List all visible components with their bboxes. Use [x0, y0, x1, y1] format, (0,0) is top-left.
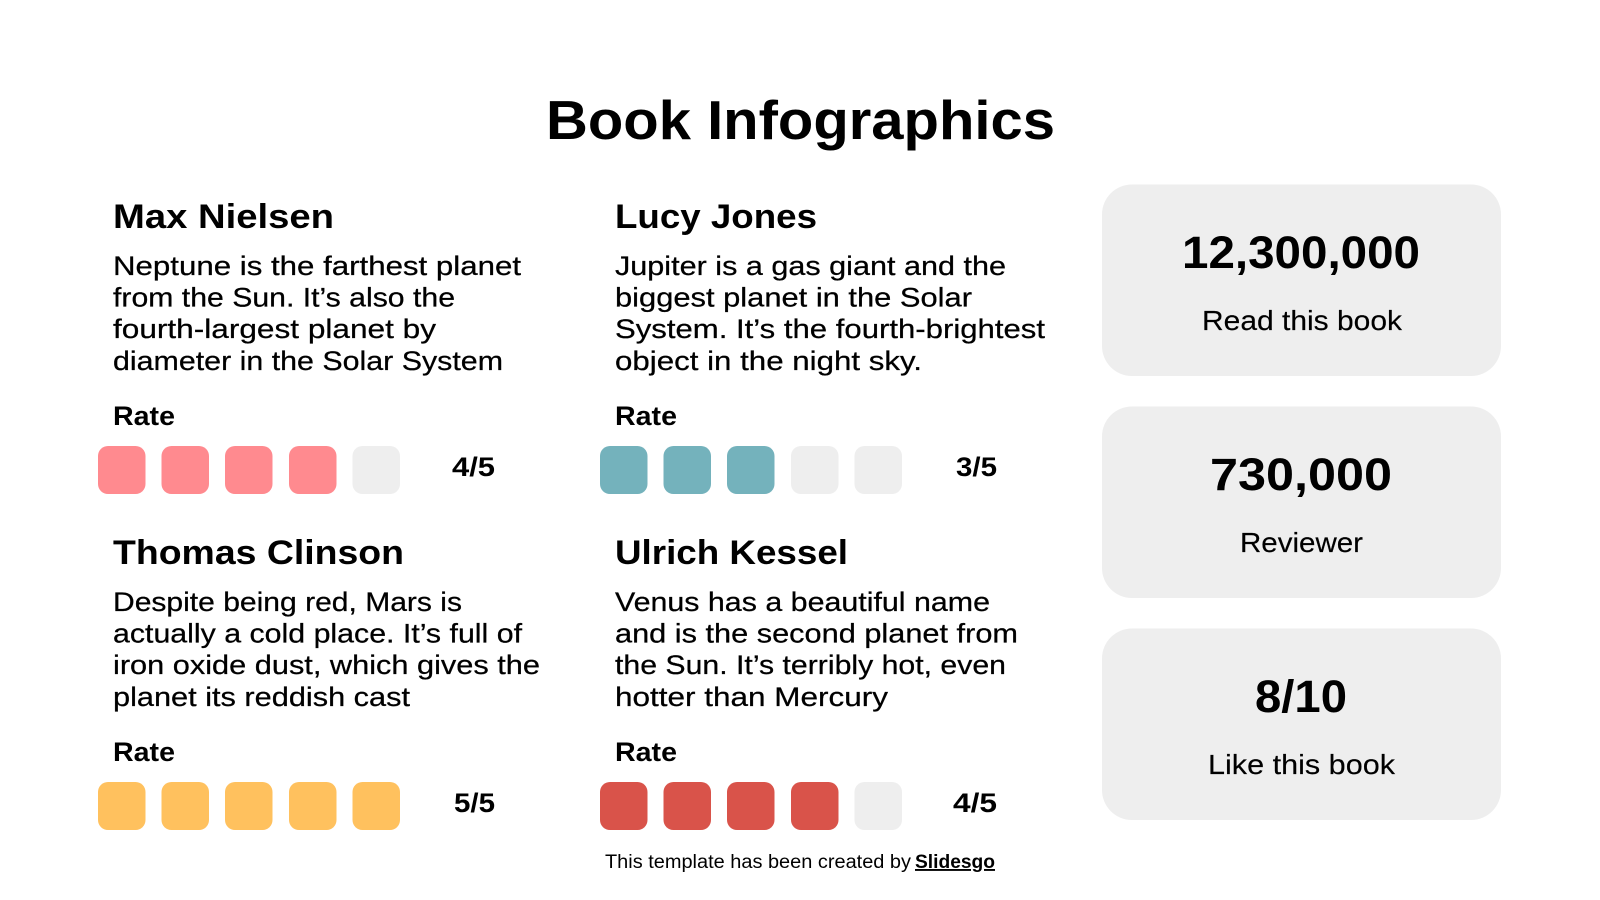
label: Rate: Rate — [113, 401, 175, 431]
stat card: reviewers — [1102, 406, 1501, 598]
rating squares: 4 of 5 — [98, 446, 400, 494]
stat number: 730,000 — [1210, 449, 1392, 500]
text block: Mars description: planet its reddish cast — [113, 682, 411, 712]
stat card: likes — [1102, 628, 1501, 820]
rating value: 4/5 — [452, 452, 495, 482]
stat label: Like this book — [1208, 749, 1396, 780]
heading: Ulrich Kessel: Ulrich Kessel — [615, 534, 848, 572]
text block: Neptune description — [113, 251, 522, 376]
text block: Mars description: actually a cold place. It’s full of — [113, 618, 523, 648]
stat number: 12,300,000 — [1182, 227, 1420, 278]
heading: Max Nielsen: Max Nielsen — [113, 198, 334, 236]
text block: Mars description: iron oxide dust, which gives the — [113, 650, 540, 680]
text block: Venus description: the Sun. It’s terribly hot, even — [615, 650, 1006, 680]
panel: Max Nielsen review — [98, 198, 522, 494]
rating value: 4/5 — [953, 788, 997, 818]
panel: Ulrich Kessel review — [600, 534, 1018, 830]
footer credit: Slidesgo — [915, 852, 995, 873]
text block: Jupiter description — [615, 251, 1046, 376]
stat label: Read this book — [1202, 305, 1403, 336]
text block: Jupiter description: object in the night sky. — [615, 346, 922, 376]
footer credit: This template has been created by — [605, 852, 912, 873]
stat label: Reviewer — [1240, 527, 1363, 558]
title: Book Infographics — [546, 89, 1055, 151]
label: Rate: Rate — [615, 737, 677, 767]
text block: Venus description: hotter than Mercury — [615, 682, 889, 712]
text block: Venus description — [615, 587, 1018, 712]
text block: Jupiter description: Jupiter is a gas giant and the — [615, 251, 1006, 281]
card background — [1102, 406, 1501, 598]
text block: Neptune description: fourth-largest planet by — [113, 314, 437, 344]
text block: Venus description: and is the second planet from — [615, 618, 1018, 648]
panel: Lucy Jones review — [600, 198, 1046, 494]
stat card: readers — [1102, 184, 1501, 376]
text block: Neptune description: Neptune is the farthest planet — [113, 251, 522, 281]
panel: Thomas Clinson review — [98, 534, 540, 830]
text block: Jupiter description: biggest planet in the Solar — [615, 282, 972, 312]
text block: Neptune description: diameter in the Solar System — [113, 346, 503, 376]
rating value: 5/5 — [454, 788, 495, 818]
text block: Mars description: Despite being red, Mars is — [113, 587, 462, 617]
text block: Neptune description: from the Sun. It’s also the — [113, 282, 455, 312]
rating squares: 5 of 5 — [98, 782, 400, 830]
heading: Thomas Clinson: Thomas Clinson — [113, 534, 404, 572]
text block: Venus description: Venus has a beautiful name — [615, 587, 990, 617]
rating squares: 3 of 5 — [600, 446, 902, 494]
stat number: 8/10 — [1255, 671, 1347, 722]
label: Rate: Rate — [615, 401, 677, 431]
text block: Jupiter description: System. It’s the fourth-brightest — [615, 314, 1046, 344]
card background — [1102, 184, 1501, 376]
rating squares: 4 of 5 — [600, 782, 902, 830]
heading: Lucy Jones: Lucy Jones — [615, 198, 817, 236]
card background — [1102, 628, 1501, 820]
label: Rate: Rate — [113, 737, 175, 767]
rating value: 3/5 — [956, 452, 997, 482]
text block: Mars description — [113, 587, 540, 712]
